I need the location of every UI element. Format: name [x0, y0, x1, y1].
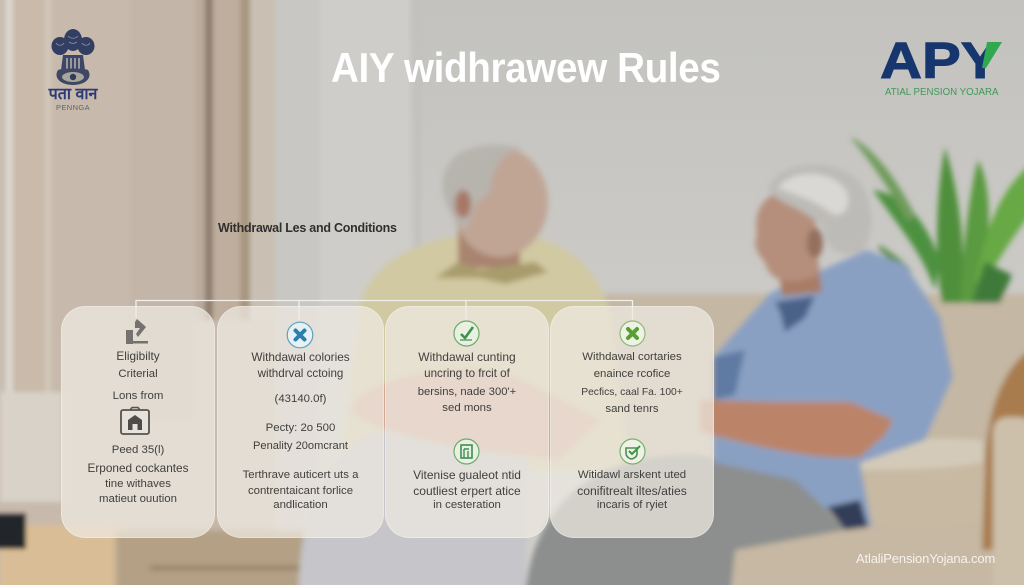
APY green tick [982, 42, 1002, 68]
man right: head [775, 238, 822, 296]
panel: withdrawal: withdrval cctoing [258, 367, 343, 380]
icon: blue cross [286, 322, 314, 348]
panel: eligibility: matieut ouution [99, 493, 177, 505]
panel: conditions [550, 306, 714, 538]
icon: green cross [619, 320, 646, 347]
logo text: pennga: PENNGA [56, 103, 90, 112]
panel: conditions: enaince rcofice [594, 368, 670, 380]
panel: counting: coutliest erpert atice [413, 484, 521, 498]
logo text: hindi: पता वान [49, 86, 97, 103]
man right: shirt [713, 250, 953, 527]
text: fee: Peed 35(l) [112, 444, 164, 456]
text: description: Vitenise gualeot ntid [413, 468, 521, 482]
cushion [853, 438, 983, 526]
panel: eligibility: tine withaves [105, 478, 171, 490]
panel: eligibility: Lons from [113, 390, 163, 402]
panel: withdrawal: Pecty: 2o 500 [266, 422, 335, 434]
icon: green document [453, 438, 480, 465]
panel: counting: sed mons [442, 402, 492, 414]
panel: withdrawal: (43140.0f) [275, 393, 326, 405]
icon: green check [453, 320, 480, 347]
section heading: Withdrawal Les and Conditions [218, 221, 397, 235]
text: withdrawal: Withdawal colories [251, 350, 350, 364]
icon: green shield check [619, 438, 646, 465]
panel: conditions: conifitrealt iltes/aties [577, 484, 687, 498]
title: AIY widhrawew Rules [331, 44, 721, 91]
logo: APY [880, 32, 1002, 98]
panel: counting [385, 306, 549, 538]
panel: conditions: Pecfics, caal Fa. 100+ [581, 387, 683, 398]
man left: trousers and hands [298, 425, 530, 585]
text: conditions: Withdawal cortaries [582, 351, 682, 363]
text: description: Witidawl arskent uted [578, 469, 686, 481]
APY subtitle: ATIAL PENSION YOJARA [885, 87, 998, 98]
panel: counting: in cesteration [433, 499, 501, 511]
panel: withdrawal: Penality 20omcrant [253, 440, 348, 452]
panel: counting: uncring to frcit of [424, 367, 510, 380]
APY wordmark: APY [880, 32, 1000, 89]
pillow [982, 350, 1024, 550]
man left: collar, neck and head [458, 225, 520, 268]
text: description: Terthrave auticert uts a [243, 469, 358, 481]
panel: withdrawal: andlication [273, 499, 328, 511]
man right: trousers [525, 455, 845, 585]
panel: eligibility: Criterial [118, 368, 158, 380]
icon: document with arrow [126, 319, 148, 344]
panel: withdrawal [217, 306, 384, 538]
text: eligibility: Eligibilty [116, 349, 160, 363]
plant [850, 137, 1024, 303]
logo: national emblem [48, 29, 98, 112]
sofa [116, 530, 306, 585]
panel: counting: bersins, nade 300'+ [418, 386, 516, 398]
panel: eligibility [61, 306, 215, 538]
man left: shirt [340, 236, 630, 470]
icon: house in box [120, 406, 150, 435]
footer url: AtlaliPensionYojana.com [856, 551, 995, 566]
panel: conditions: incaris of ryiet [597, 499, 667, 511]
panel: withdrawal: contrentaicant forlice [248, 485, 353, 497]
panel: conditions: sand tenrs [605, 403, 659, 415]
text: description: Erponed cockantes [88, 461, 188, 475]
man right: arm [700, 400, 893, 458]
text: counting: Withdawal cunting [418, 350, 516, 364]
